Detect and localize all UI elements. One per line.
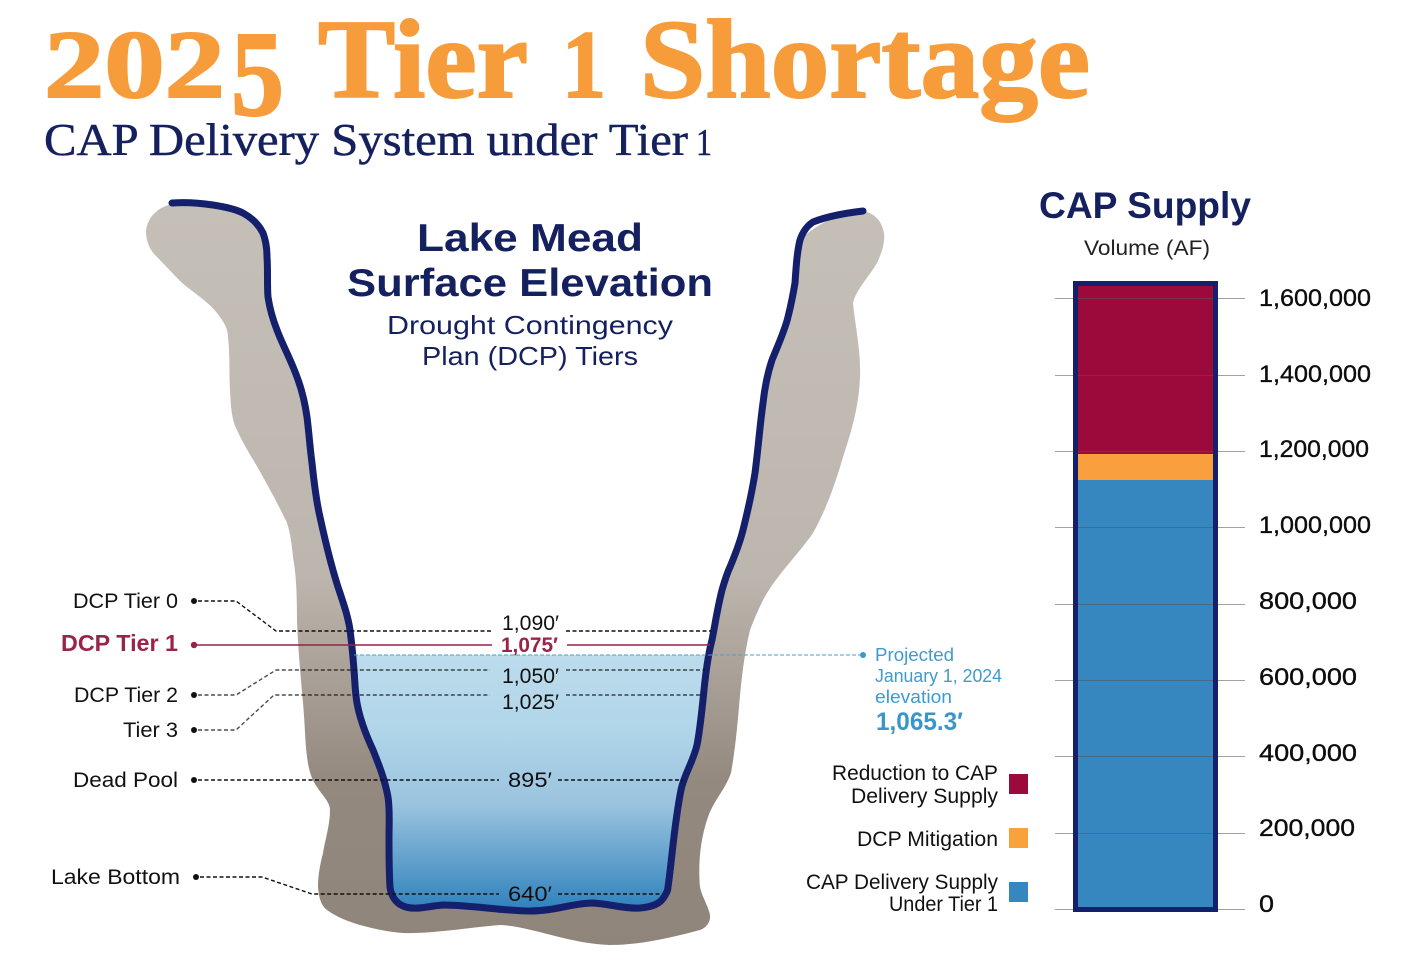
callout: projected elevation: Projected <box>875 645 954 665</box>
axis labels: 1,600,000 <box>1259 285 1371 312</box>
level: Lake Bottom / 640 <box>51 866 662 906</box>
panel: Lake Mead cross-section <box>51 195 884 945</box>
panel heading: Lake Mead Surface Elevation <box>347 217 713 371</box>
callout: projected elevation: 1,065.3′ <box>876 708 963 736</box>
legend item: reduction <box>832 762 1028 808</box>
level: DCP Tier 2 / 1,050 <box>74 665 705 707</box>
axis labels: 200,000 <box>1259 815 1355 842</box>
level: Tier 3 / 1,025 <box>123 691 703 742</box>
panel heading: Lake Mead Surface Elevation: Lake Mead <box>417 217 643 260</box>
title: 5 <box>231 7 284 142</box>
title: 202 <box>44 11 225 118</box>
legend item: delivery supply: CAP Delivery Supply <box>806 871 998 894</box>
legend item: reduction: Delivery Supply <box>851 785 998 808</box>
panel heading: CAP Supply: CAP Supply <box>1039 185 1251 226</box>
level: DCP Tier 2 / 1,050: 1,050′ <box>502 665 559 688</box>
level: DCP Tier 0 / 1,090: DCP Tier 0 <box>73 590 178 613</box>
level: DCP Tier 0 / 1,090: 1,090′ <box>502 612 559 635</box>
axis labels: 0 <box>1259 891 1274 918</box>
axis labels: 600,000 <box>1259 664 1357 691</box>
subtitle: CAP Delivery System under Tier <box>44 115 688 165</box>
segment: CAP delivery supply <box>1075 480 1216 909</box>
subtitle: 1 <box>696 122 712 164</box>
stacked bar chart <box>1055 284 1371 918</box>
level: DCP Tier 0 / 1,090 <box>73 590 711 635</box>
axis labels: 1,200,000 <box>1259 436 1369 463</box>
canyon wall outline <box>172 203 863 911</box>
panel heading: Lake Mead Surface Elevation: Surface Elevation <box>347 262 713 305</box>
title <box>44 0 1090 142</box>
bar frame <box>1076 284 1216 910</box>
level: Tier 3 / 1,025: 1,025′ <box>502 691 559 714</box>
legend item: delivery supply: Under Tier 1 <box>889 893 998 916</box>
legend item: delivery supply <box>806 871 1028 916</box>
axis labels <box>1259 285 1371 918</box>
level: DCP Tier 1 / 1,075: 1,075′ <box>501 634 558 657</box>
legend item: mitigation: DCP Mitigation <box>857 828 998 851</box>
level: Dead Pool / 895 <box>73 769 683 792</box>
title: 1 <box>562 11 606 118</box>
level: DCP Tier 1 / 1,075 <box>61 630 710 657</box>
legend <box>806 762 1028 916</box>
level: Lake Bottom / 640: 640′ <box>508 883 552 906</box>
level: DCP Tier 2 / 1,050: DCP Tier 2 <box>74 684 178 707</box>
panel heading: Lake Mead Surface Elevation: Plan (DCP) Tiers <box>422 341 638 371</box>
segment: reduction <box>1075 284 1216 454</box>
segment: DCP mitigation <box>1075 454 1216 480</box>
title: Tier <box>318 0 528 122</box>
axis labels: 800,000 <box>1259 588 1357 615</box>
panel heading: Lake Mead Surface Elevation: Drought Contingency <box>387 310 673 340</box>
level: Dead Pool / 895: 895′ <box>508 769 552 792</box>
level: Lake Bottom / 640: Lake Bottom <box>51 866 180 889</box>
level: Tier 3 / 1,025: Tier 3 <box>123 719 178 742</box>
level: DCP Tier 1 / 1,075: DCP Tier 1 <box>61 630 178 656</box>
water body <box>356 655 705 908</box>
axis labels: 1,400,000 <box>1259 361 1371 388</box>
panel heading: CAP Supply <box>1039 185 1251 260</box>
canyon rock <box>146 204 884 945</box>
title: Shortage <box>640 0 1090 122</box>
level: Dead Pool / 895: Dead Pool <box>73 769 178 792</box>
axis labels: 1,000,000 <box>1259 512 1371 539</box>
callout: projected elevation: elevation <box>875 687 952 707</box>
callout: projected elevation <box>354 645 1002 736</box>
axis labels: 400,000 <box>1259 740 1357 767</box>
panel heading: CAP Supply: Volume (AF) <box>1084 237 1210 260</box>
basin interior <box>240 208 796 655</box>
callout: projected elevation: January 1, 2024 <box>875 666 1002 686</box>
legend item: reduction: Reduction to CAP <box>832 762 998 785</box>
